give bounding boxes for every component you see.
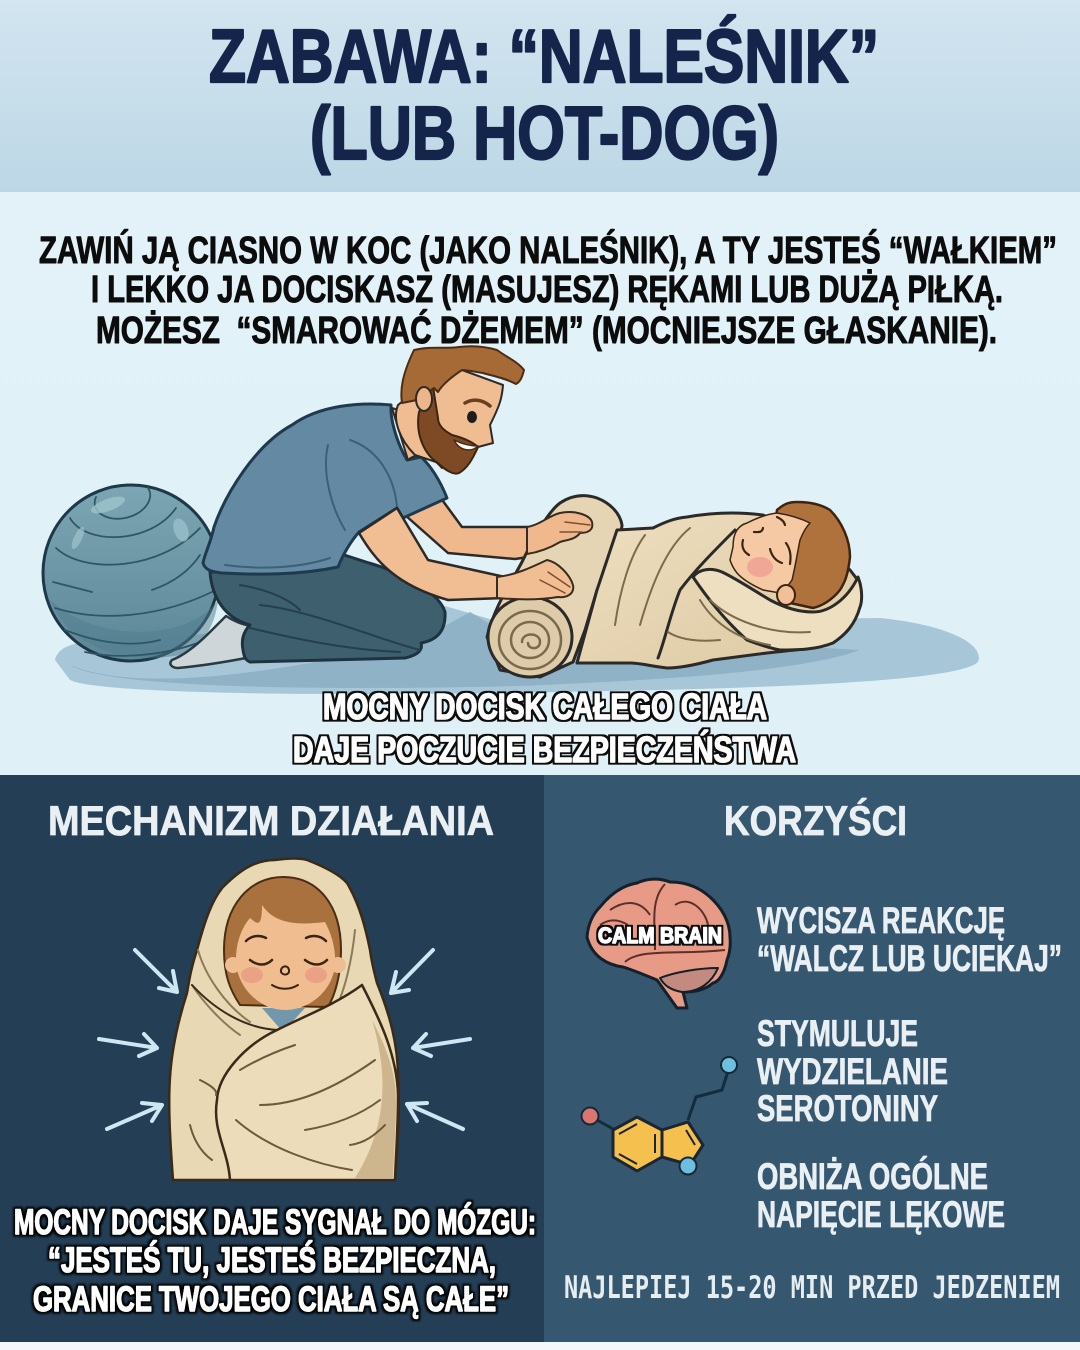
far arm — [405, 497, 535, 559]
head — [392, 346, 524, 474]
panel: illustration background — [0, 192, 1080, 776]
face — [396, 370, 503, 470]
ear right — [330, 957, 346, 973]
eyes — [246, 936, 327, 964]
panel: benefits — [544, 775, 1080, 1342]
instruction text block — [39, 228, 1057, 352]
hand: lower — [497, 560, 573, 599]
sock — [170, 616, 250, 668]
mechanism caption: MOCNY DOCISK DAJE SYGNAŁ DO MÓZGU: — [14, 1202, 536, 1242]
eyebrow — [465, 400, 490, 406]
blanket body — [577, 513, 861, 668]
blanket hood fold — [693, 569, 862, 650]
baby ear — [777, 585, 795, 605]
left flap edge — [192, 985, 277, 1030]
floor shadow — [55, 606, 979, 694]
blanket wrap fold — [658, 530, 735, 658]
brain label: CALM BRAIN — [598, 923, 722, 948]
shirt — [203, 404, 447, 574]
panel: bottom white strip — [0, 1342, 1080, 1350]
text: benefit 3 — [757, 1155, 1005, 1235]
mechanism caption: “JESTEŚ TU, JESTEŚ BEZPIECZNA, — [48, 1240, 496, 1280]
panel: mechanism — [0, 775, 544, 1342]
icon: exercise ball — [43, 485, 219, 661]
icon: child wrapped in blanket — [99, 858, 470, 1180]
ears — [225, 957, 241, 973]
beard — [418, 385, 478, 474]
rolled blanket — [487, 496, 622, 677]
panel: header background — [0, 0, 1080, 192]
text: benefit 3: OBNIŻA OGÓLNE — [757, 1155, 988, 1197]
caption: whole-body pressure — [293, 686, 796, 770]
text: benefit 2: STYMULUJE — [757, 1013, 918, 1054]
nose and mouth — [272, 966, 298, 989]
blanket creases — [190, 1045, 385, 1170]
heading: mechanism: MECHANIZM DZIAŁANIA — [48, 797, 494, 844]
hood crease — [192, 930, 355, 1035]
neck — [392, 408, 442, 468]
face — [236, 905, 335, 1010]
icon: serotonin molecule — [582, 1057, 737, 1174]
mechanism caption: GRANICE TWOJEGO CIAŁA SĄ CAŁE” — [33, 1280, 509, 1319]
caption: whole-body pressure: DAJE POCZUCIE BEZPIECZEŃSTWA — [293, 729, 796, 770]
blanket base — [169, 858, 399, 1180]
floor shadow inner — [70, 612, 860, 688]
shirt sleeve seam — [225, 440, 397, 568]
arrows pressing inward — [99, 950, 470, 1129]
mechanism caption — [14, 1202, 536, 1319]
collar — [262, 1008, 305, 1032]
caption: whole-body pressure: MOCNY DOCISK CAŁEGO CIAŁA — [323, 686, 767, 727]
text: benefit 1 — [757, 900, 1062, 979]
blanket shaded side — [355, 1020, 396, 1178]
text: benefit 2 — [757, 1013, 948, 1129]
swaddled baby — [577, 502, 862, 668]
near arm — [359, 508, 505, 600]
heading: benefits: KORZYŚCI — [724, 796, 907, 844]
title: (LUB HOT-DOG) — [310, 91, 779, 175]
ear — [416, 387, 432, 411]
trousers — [210, 553, 445, 662]
brain folds — [600, 884, 725, 962]
blanket wrap flap — [216, 985, 398, 1180]
eye — [467, 411, 477, 423]
text: benefit 2: SEROTONINY — [757, 1088, 938, 1129]
baby eyes and mouth — [742, 517, 791, 564]
baby face — [730, 513, 810, 593]
hand: upper — [527, 512, 592, 554]
right cheek — [305, 967, 327, 983]
trouser crease — [240, 585, 420, 652]
mouth — [454, 440, 478, 450]
ball highlights — [89, 493, 127, 517]
baby cheek — [747, 557, 773, 577]
text: benefit 2: WYDZIELANIE — [757, 1051, 948, 1092]
title: ZABAWA: “NALEŚNIK” — [209, 14, 879, 98]
hair — [401, 346, 524, 403]
blanket crease lines — [615, 528, 810, 645]
icon: calm brain — [587, 879, 730, 1008]
title — [209, 14, 879, 175]
baby hair — [770, 502, 850, 608]
hair — [224, 877, 341, 1007]
cheeks — [241, 967, 263, 983]
illustration: father massaging wrapped child — [43, 346, 979, 694]
cerebellum — [660, 968, 718, 992]
